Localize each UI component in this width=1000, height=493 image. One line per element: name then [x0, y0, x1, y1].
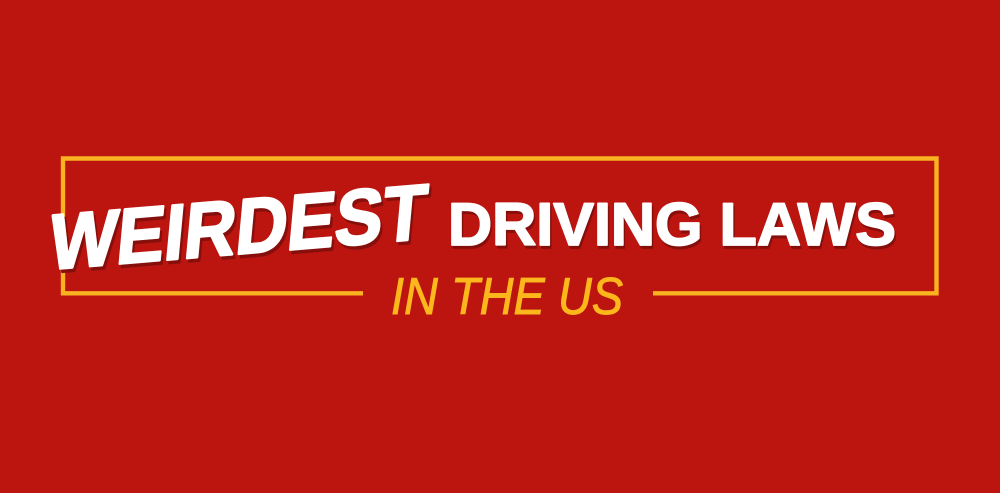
heading: weirdest: WEIRDEST	[46, 167, 431, 287]
heading: weirdest: WEIRDEST	[48, 171, 433, 290]
yellow frame	[63, 158, 936, 293]
heading: driving laws: DRIVING LAWS	[450, 194, 898, 261]
heading: driving laws: DRIVING LAWS	[448, 191, 896, 258]
subheading: in the us: IN THE US	[391, 268, 623, 326]
